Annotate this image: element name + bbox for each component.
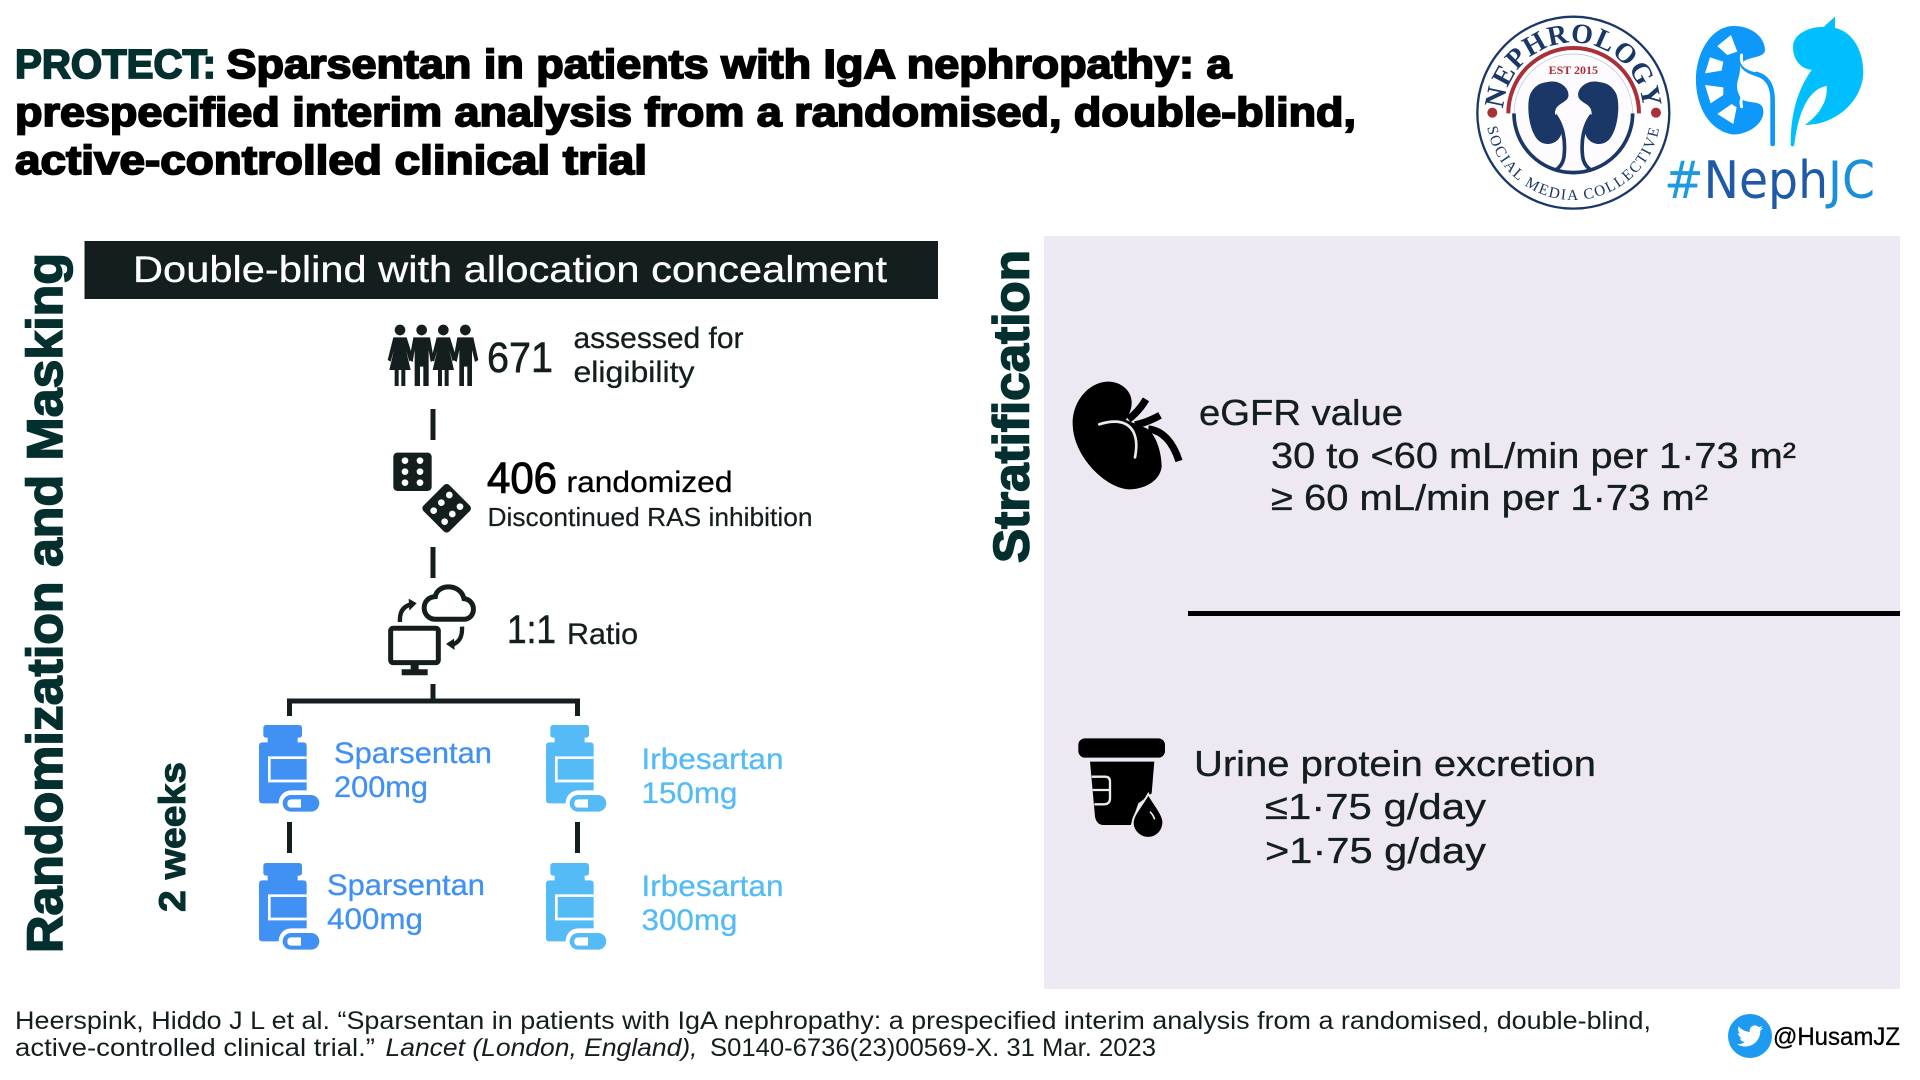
logo: Nephrology Social Media Collective: NEPHROLOGY <box>1484 24 1662 108</box>
label: Irbesartan 150mg <box>642 743 784 810</box>
citation: active-controlled clinical trial.” <box>15 1034 375 1062</box>
icon: people <box>388 325 478 386</box>
icon: Sparsentan 400mg bottle <box>259 863 323 955</box>
icon: Irbesartan 150mg bottle <box>546 725 610 817</box>
count: 406 randomized: randomized <box>566 466 732 499</box>
tree connector <box>290 684 578 716</box>
connector <box>430 547 436 578</box>
label: Sparsentan 400mg: 400mg <box>327 903 423 936</box>
connector <box>287 822 292 853</box>
count: 406 randomized <box>487 454 812 532</box>
citation: Lancet (London, England), <box>386 1034 698 1062</box>
handle: @HusamJZ: @HusamJZ <box>1773 1023 1900 1051</box>
label: Sparsentan 400mg: Sparsentan <box>327 869 485 902</box>
label: Sparsentan 200mg: 200mg <box>334 771 428 804</box>
title: PROTECT: <box>15 41 216 87</box>
citation <box>15 1007 1651 1062</box>
text: eGFR value <box>1199 392 1796 518</box>
text: urine protein excretion: Urine protein excretion <box>1194 743 1596 784</box>
citation: S0140-6736(23)00569-X. 31 Mar. 2023 <box>710 1034 1156 1062</box>
count: 406 randomized: Discontinued RAS inhibition <box>488 502 812 532</box>
vertical heading: Stratification: Stratification <box>984 250 1040 563</box>
title <box>15 41 1356 183</box>
count: 406 randomized: 406 <box>487 454 557 503</box>
count: 671 assessed <box>487 322 744 389</box>
label: Sparsentan 400mg <box>327 869 485 936</box>
text: eGFR value: 30 to <60 mL/min per 1·73 m² <box>1271 435 1796 476</box>
title: prespecified interim analysis from a randomised, double-blind, <box>15 89 1356 135</box>
citation: Heerspink, Hiddo J L et al. “Sparsentan in patients with IgA nephropathy: a prespecified interim analysis from a randomised, double-blind, <box>15 1007 1651 1035</box>
text: urine protein excretion <box>1194 743 1596 871</box>
count: 671 assessed: 671 <box>487 334 553 382</box>
label: Sparsentan 200mg <box>334 737 492 804</box>
label: Irbesartan 150mg: Irbesartan <box>642 743 784 776</box>
title: active-controlled clinical trial <box>15 137 647 183</box>
logo: NephJC kidneys <box>1696 17 1863 147</box>
connector <box>575 822 580 853</box>
text: urine protein excretion: >1·75 g/day <box>1265 830 1486 871</box>
ratio: 1:1 <box>507 608 638 652</box>
connector <box>430 409 436 440</box>
icon: kidney <box>1073 382 1179 489</box>
ratio: 1:1: 1:1 <box>507 608 556 652</box>
label: Sparsentan 200mg: Sparsentan <box>334 737 492 770</box>
icon: Irbesartan 300mg bottle <box>546 863 610 955</box>
label: Irbesartan 300mg <box>642 870 784 937</box>
logo: Nephrology Social Media Collective: SOCIAL MEDIA COLLECTIVE <box>1488 126 1659 200</box>
count: 671 assessed: assessed for <box>574 322 744 355</box>
icon: Sparsentan 200mg bottle <box>259 725 323 817</box>
logo: Nephrology Social Media Collective: EST 2015 <box>1549 63 1598 77</box>
logo: Nephrology Social Media Collective <box>1476 16 1670 210</box>
text: urine protein excretion: ≤1·75 g/day <box>1265 786 1486 827</box>
icon: dice <box>393 453 473 534</box>
title: Sparsentan in patients with IgA nephropathy: a <box>226 41 1233 87</box>
label: Irbesartan 300mg: Irbesartan <box>642 870 784 903</box>
count: 671 assessed: eligibility <box>574 356 694 389</box>
ratio: 1:1: Ratio <box>567 618 638 651</box>
label: Irbesartan 300mg: 300mg <box>642 904 738 937</box>
banner: double-blind: Double-blind with allocation concealment <box>133 249 888 290</box>
label: Irbesartan 150mg: 150mg <box>642 777 738 810</box>
vertical heading: Randomization and Masking: Randomization and Masking <box>17 253 73 953</box>
icon: twitter <box>1728 1014 1772 1058</box>
hashtag: #NephJC: #NephJC <box>1664 151 1875 211</box>
icon: computer and cloud <box>391 587 473 675</box>
icon: urine cup <box>1078 738 1165 838</box>
text: eGFR value: eGFR value <box>1199 392 1403 433</box>
text: eGFR value: ≥ 60 mL/min per 1·73 m² <box>1271 477 1708 518</box>
panel: stratification <box>1044 236 1900 989</box>
banner: double-blind <box>84 241 938 299</box>
vertical label: 2 weeks: 2 weeks <box>152 762 193 912</box>
